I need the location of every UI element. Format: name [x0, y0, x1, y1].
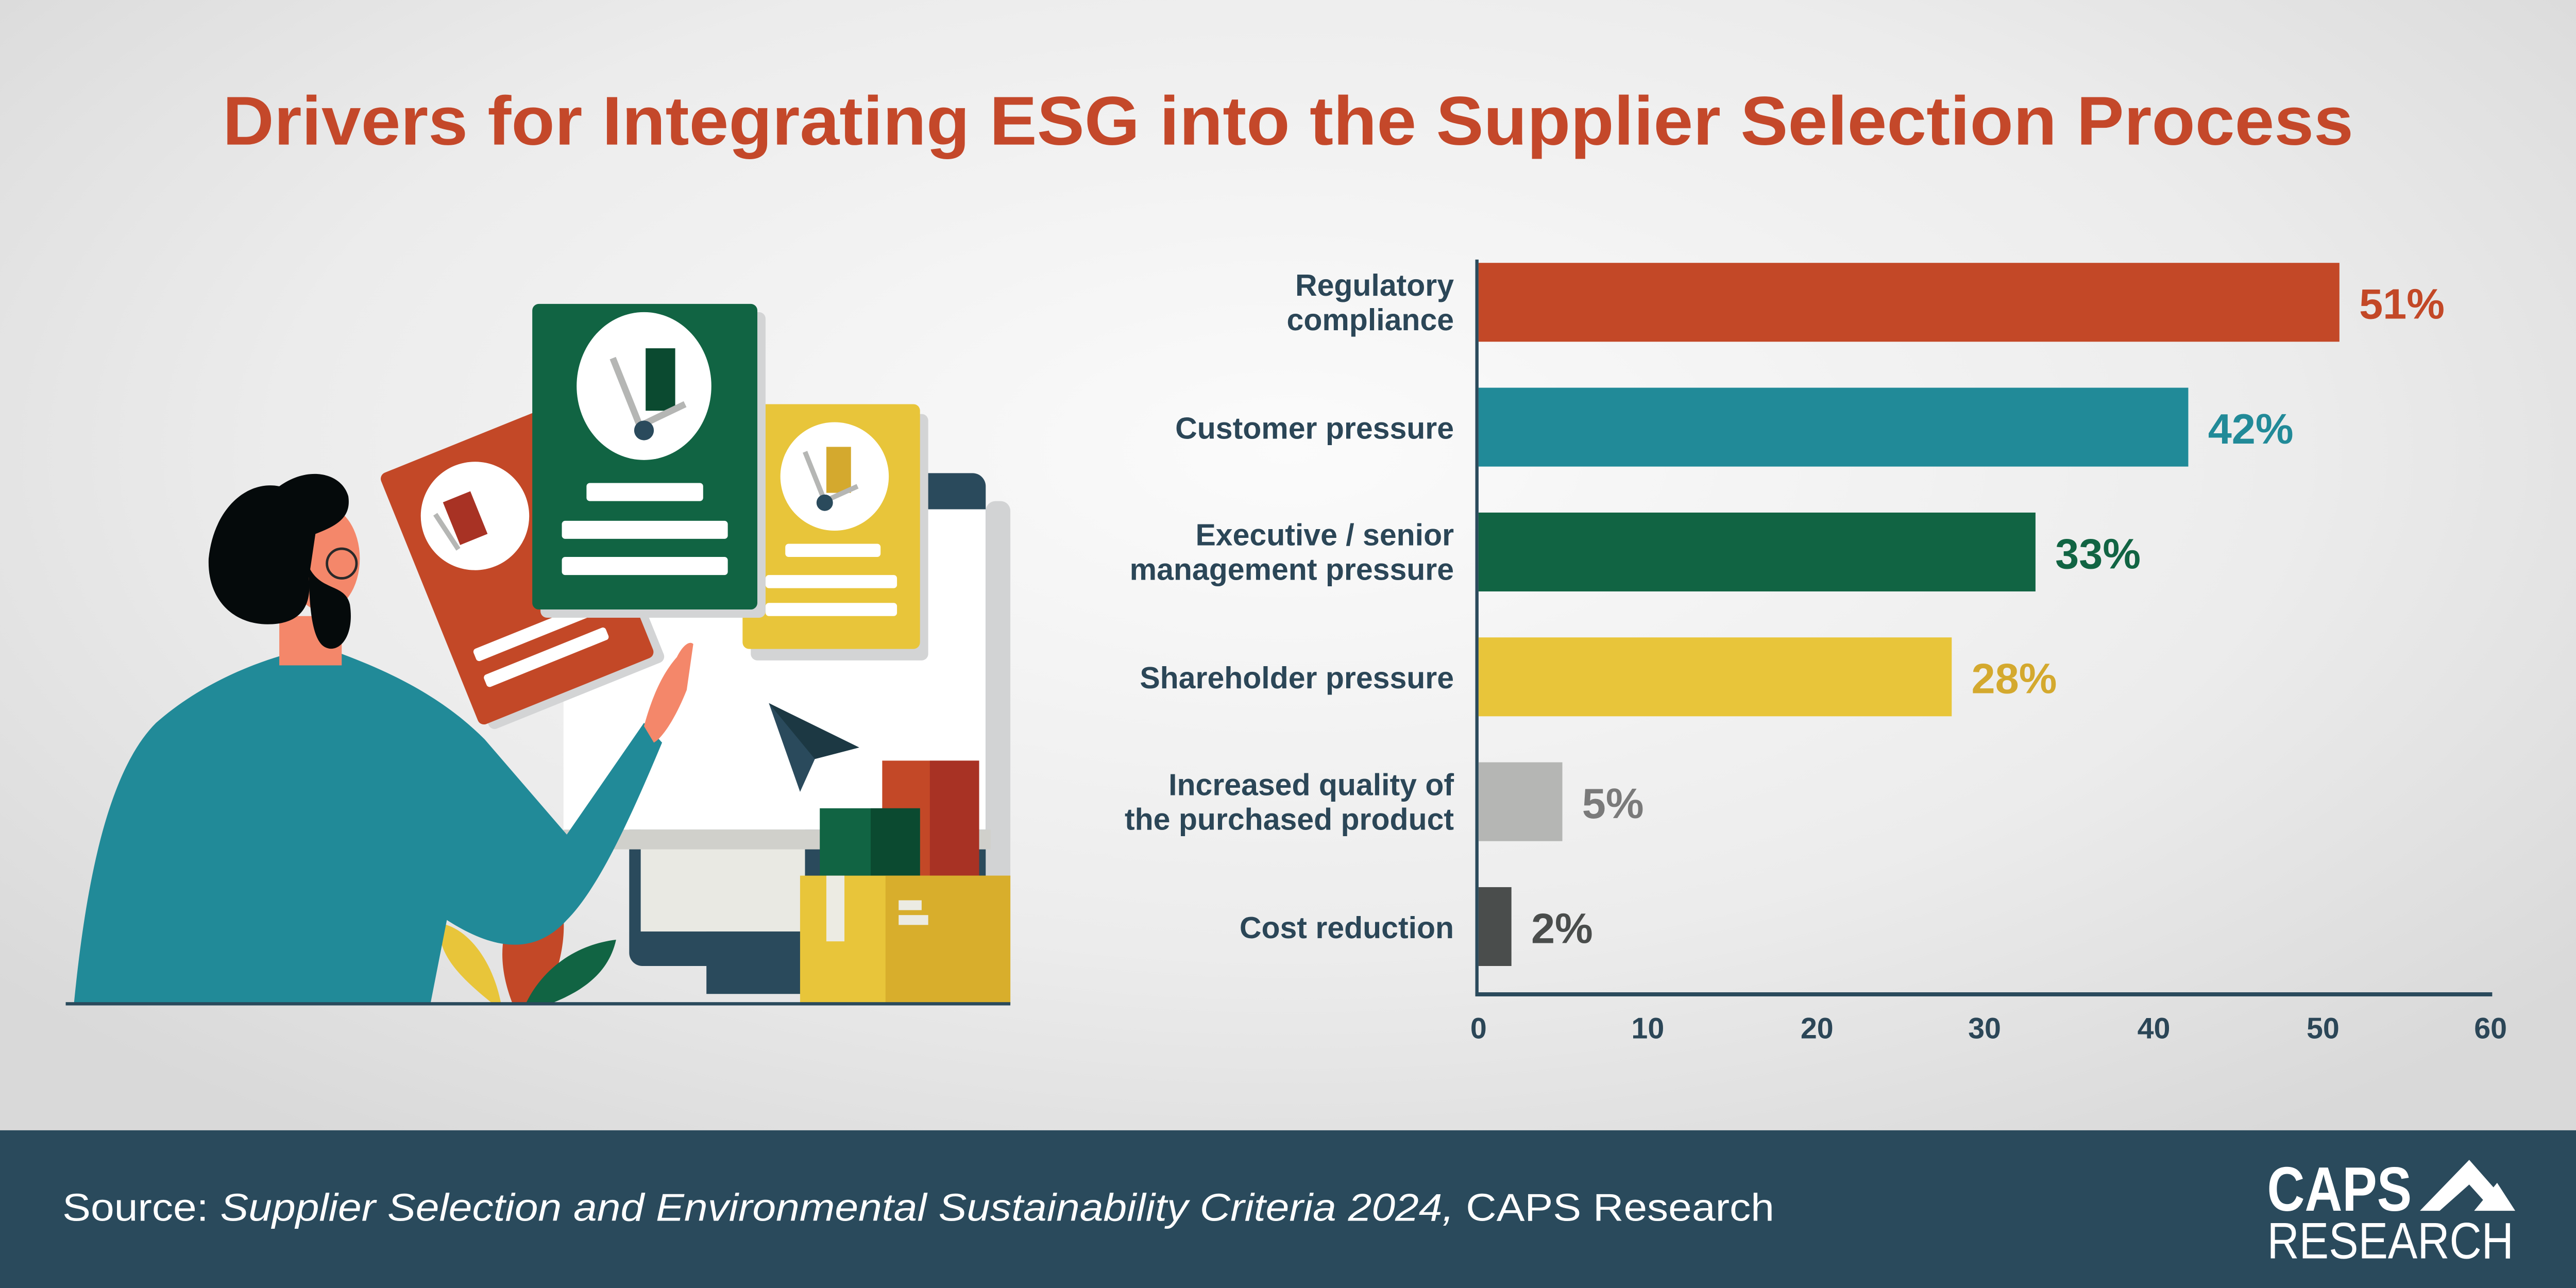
row: Cost reduction: Cost reduction: [1240, 911, 1454, 945]
row: Executive / senior management pressure: Executive / senior: [1195, 518, 1454, 552]
illustration: person with supplier cards and monitor: [66, 304, 1010, 1006]
row: Shareholder pressure: Shareholder pressure: [1140, 661, 1454, 695]
title: Drivers for Integrating ESG into the Supplier Selection Process: [223, 83, 2353, 160]
row: Customer pressure: Customer pressure: [1175, 411, 1454, 445]
row: Cost reduction: [1240, 887, 1593, 966]
x-axis tick labels: 40: [2138, 1012, 2170, 1045]
row: Increased quality: [1125, 762, 1644, 841]
icon: cursor arrow: [769, 703, 859, 792]
row: Regulatory compliance: [1287, 263, 2445, 342]
row: Regulatory compliance: 51%: [2359, 280, 2445, 328]
row: Executive / senior management pressure: management pressure: [1130, 553, 1454, 587]
logo: CAPS Research: CAPS: [2267, 1154, 2412, 1224]
floor line: [66, 1002, 1010, 1006]
x-axis tick labels: 30: [1968, 1012, 2001, 1045]
row: Shareholder pressure: [1140, 637, 2057, 716]
person: [74, 474, 693, 1004]
card: red: [379, 401, 666, 734]
source text: Source: Supplier Selection and Environmental Sustainability Criteria 2024, CAPS Research: [62, 1185, 1774, 1229]
x-axis tick labels: 0: [1470, 1012, 1487, 1045]
card: green: [532, 304, 766, 618]
logo: CAPS Research: [2267, 1154, 2515, 1269]
footer: [0, 1130, 2576, 1288]
row: Increased quality: 5%: [1582, 779, 1644, 827]
row: Executive / senior management pressure: 33%: [2055, 530, 2141, 578]
row: Increased quality: Increased quality of: [1168, 768, 1454, 802]
boxes: [800, 760, 1010, 1004]
row: Increased quality: the purchased product: [1125, 802, 1454, 836]
x-axis tick labels: 60: [2474, 1012, 2507, 1045]
bar chart: [1125, 260, 2507, 1045]
x-axis tick labels: 50: [2307, 1012, 2340, 1045]
row: Shareholder pressure: 28%: [1972, 655, 2057, 703]
row: Cost reduction: 2%: [1531, 904, 1593, 952]
card: yellow: [742, 404, 928, 660]
plants: [439, 862, 616, 1004]
row: Customer pressure: [1175, 388, 2294, 467]
logo: CAPS Research: RESEARCH: [2267, 1213, 2514, 1269]
row: Executive / senior management pressure: [1130, 513, 2141, 591]
x-axis tick labels: 20: [1801, 1012, 1834, 1045]
axes: [1476, 260, 1479, 995]
x-axis tick labels: 10: [1631, 1012, 1664, 1045]
row: Customer pressure: 42%: [2208, 405, 2294, 453]
row: Regulatory compliance: Regulatory: [1295, 268, 1454, 302]
monitor: [564, 473, 1010, 994]
row: Regulatory compliance: compliance: [1287, 303, 1454, 337]
x-axis tick labels: [1470, 1012, 2507, 1045]
